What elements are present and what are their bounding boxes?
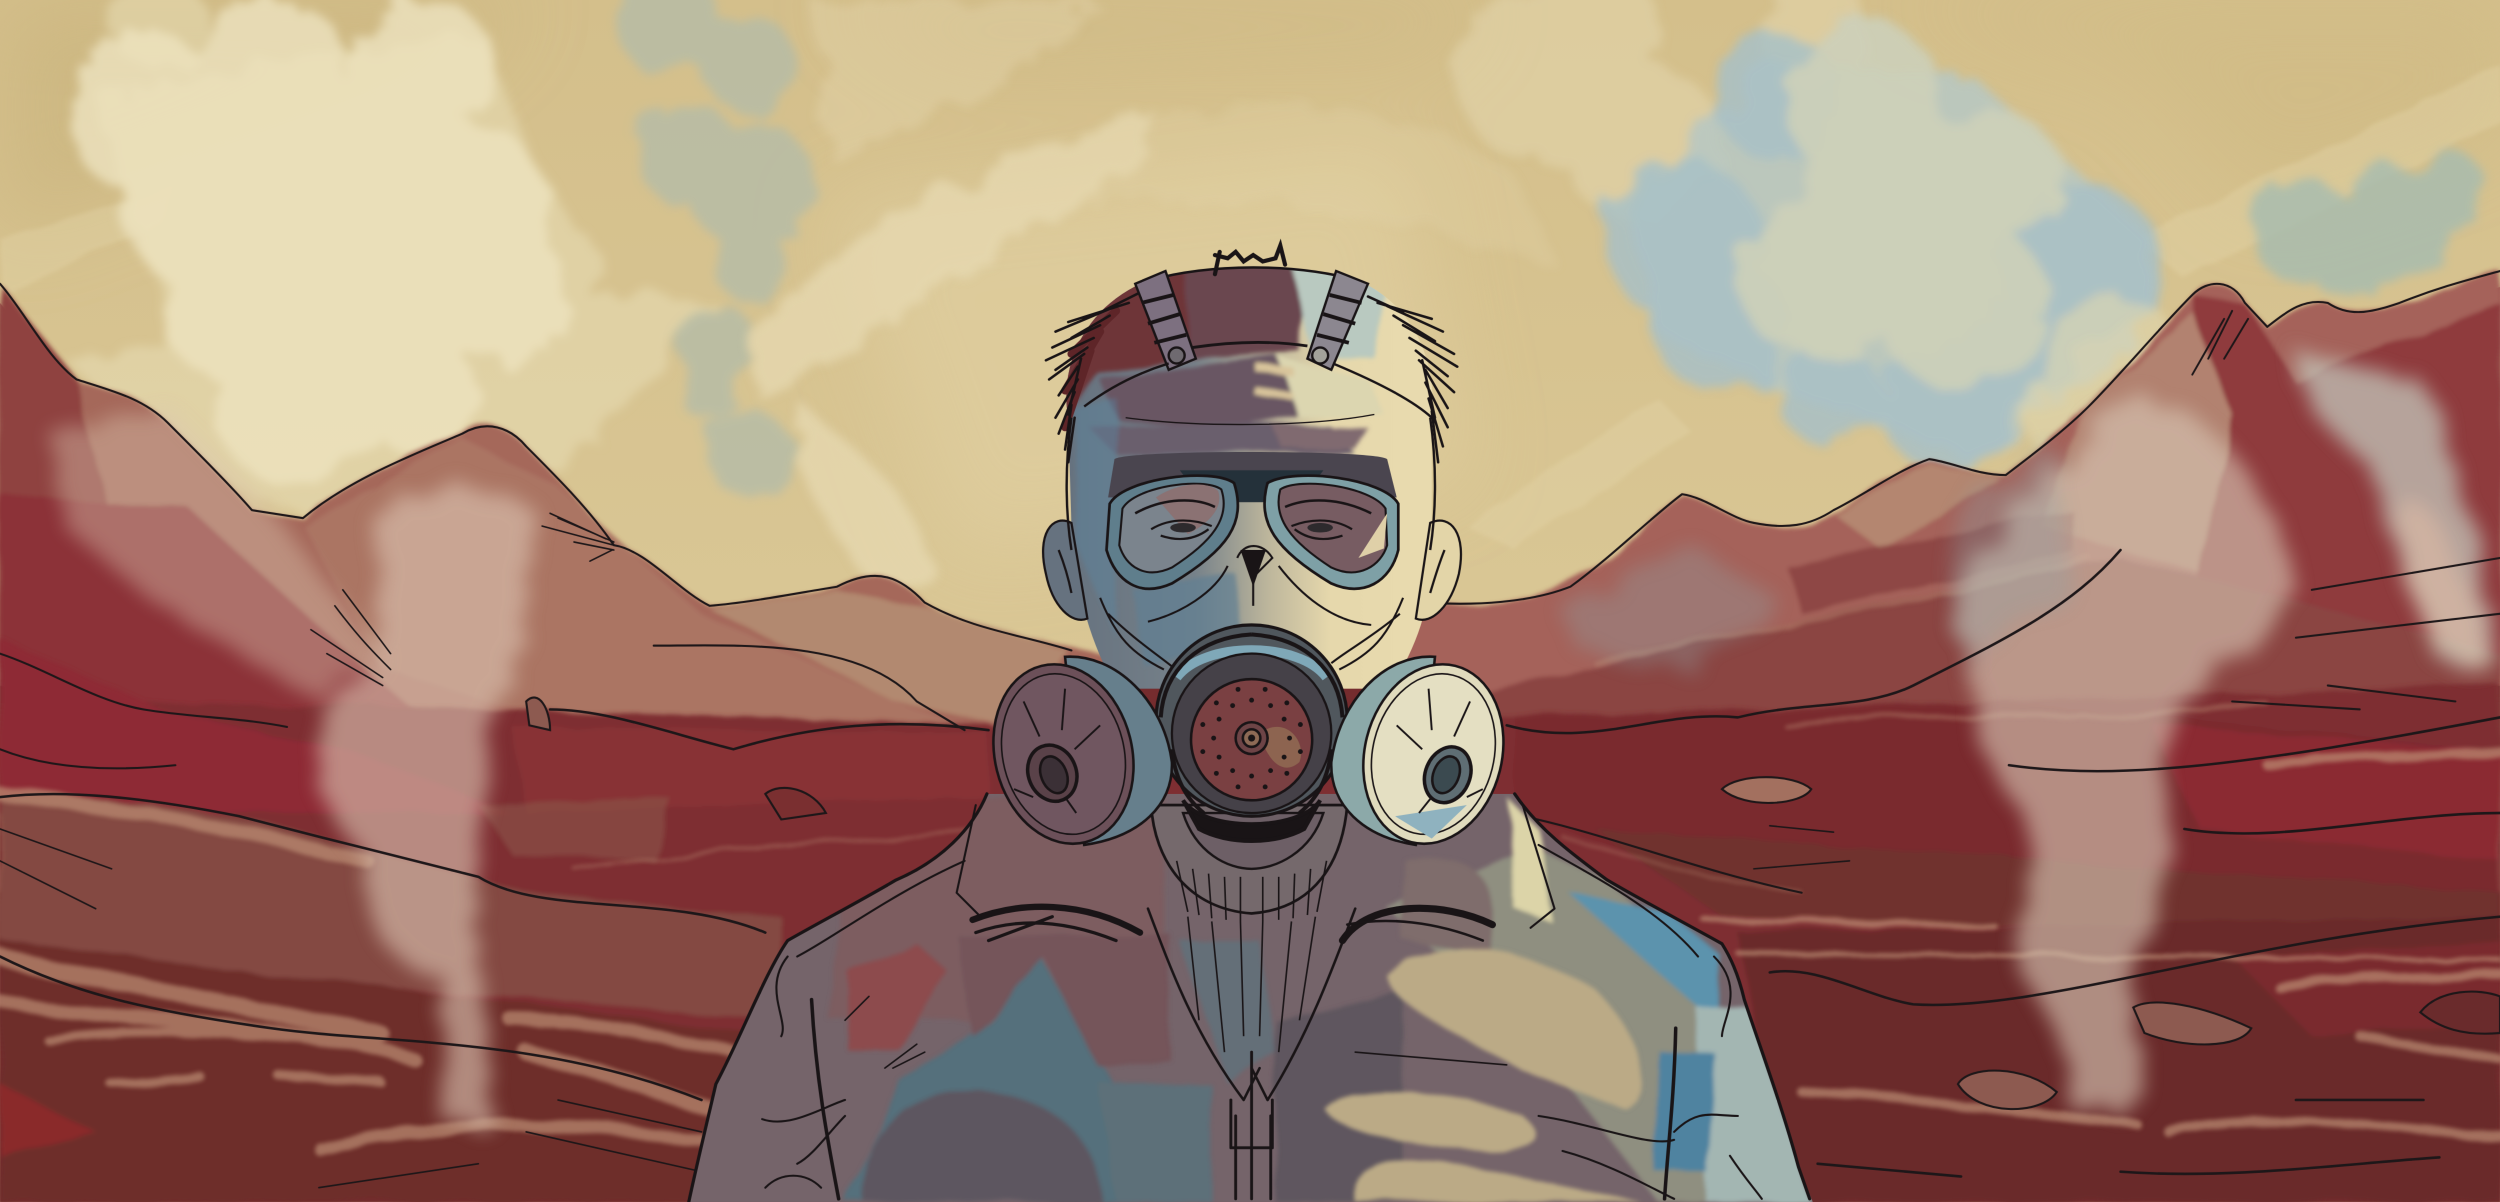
- mountains: right range: [1403, 271, 2500, 893]
- cloud: blue wisp far right: [2251, 151, 2487, 300]
- gas mask: centre filter: [1156, 625, 1347, 841]
- smoke column: far left haze: [48, 414, 383, 701]
- head paint patches: [1052, 263, 1387, 670]
- man: goggles: [1100, 452, 1403, 670]
- rocks: [526, 698, 2500, 1109]
- landscape base underlay: [0, 287, 2500, 1202]
- man: hair: [1046, 246, 1457, 462]
- gas mask: left canister: [975, 649, 1172, 859]
- man: ears: [1043, 521, 1461, 620]
- gas mask: right canister: [1331, 649, 1522, 859]
- jacket ink lines: [689, 794, 1810, 1202]
- cloud: blue and cream billow upper right: [1454, 0, 2180, 470]
- smoke column: left: [318, 483, 535, 1124]
- man: head: [1052, 263, 1433, 689]
- mountains: left range: [0, 284, 1116, 893]
- cloud: grey-blue plume top centre: [617, 0, 813, 497]
- man: jacket: [689, 794, 1813, 1202]
- jacket paint patches: [829, 797, 1810, 1202]
- smoke column: far right: [2296, 351, 2495, 670]
- ground: pale streaks: [0, 558, 2500, 1148]
- man: head straps: [1067, 271, 1435, 550]
- ground: red plain: [0, 638, 2500, 1202]
- mask nose piece: [1100, 546, 1403, 670]
- cloud: cream streaks top centre: [749, 0, 1562, 598]
- landscape ink lines: [0, 271, 2500, 1188]
- filter perforations: [1200, 687, 1303, 789]
- smoke haze: blue over right mountains: [1562, 446, 2073, 670]
- smoke column: right: [1961, 397, 2296, 1113]
- cloud: cream smoke upper left: [64, 0, 717, 526]
- goggle lens: right: [1264, 476, 1398, 589]
- goggle lens: left: [1107, 476, 1238, 589]
- man: neck and sweater collar: [1151, 805, 1347, 1052]
